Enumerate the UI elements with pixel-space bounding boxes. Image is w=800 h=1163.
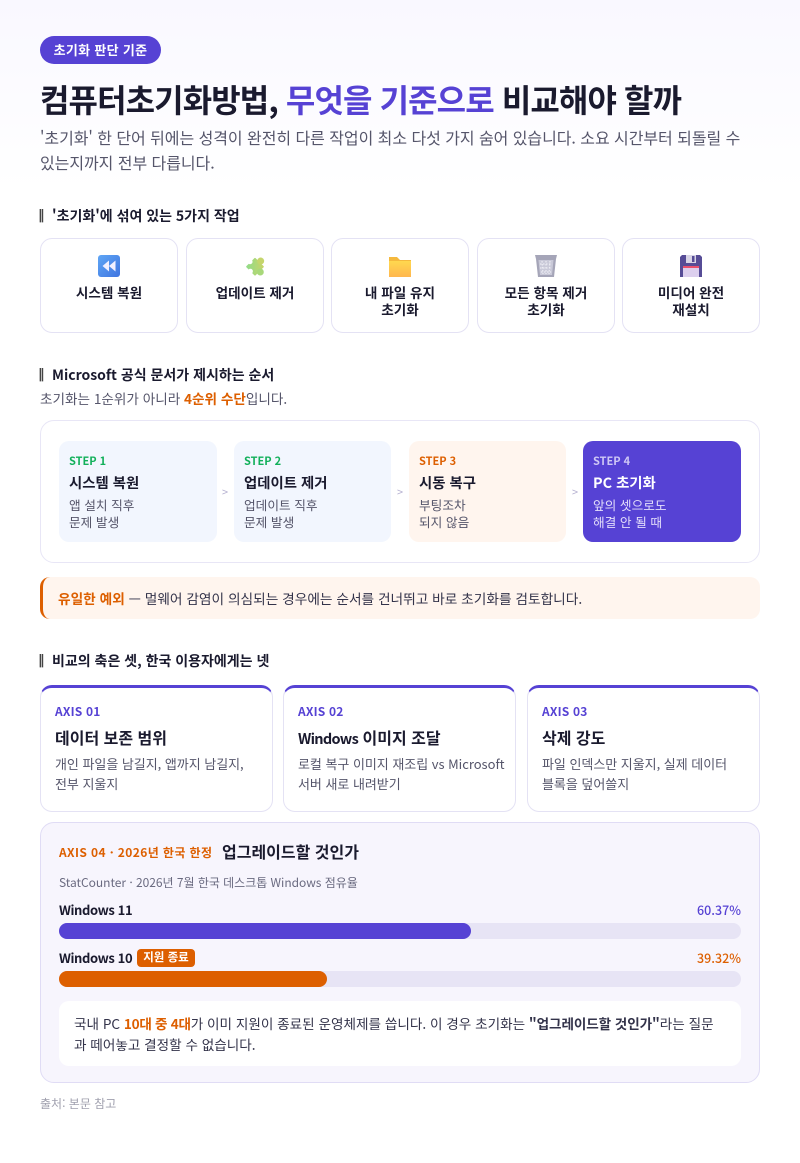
step 2: 업데이트 제거 — [244, 472, 327, 493]
axis 02: Windows 이미지 조달 — [298, 725, 441, 749]
step 2: STEP 2 — [244, 453, 281, 469]
step 1: STEP 1 — [69, 453, 106, 469]
callout: exception — [40, 577, 760, 619]
card: remove everything reset: 모든 항목 제거 — [505, 282, 587, 302]
step 2 — [234, 441, 391, 542]
heading: five tasks: '초기화'에 섞여 있는 5가지 작업 — [52, 206, 240, 226]
step 2: 업데이트 직후 — [244, 495, 318, 514]
source: 출처: 본문 참고 — [40, 1095, 116, 1112]
title: 컴퓨터초기화방법, 무엇을 기준으로 비교해야 할까 — [40, 76, 681, 122]
axis 01 — [40, 685, 273, 812]
step 3: 부팅조차 — [419, 495, 466, 514]
step 4: PC 초기화 — [593, 472, 656, 493]
step 3: 되지 않음 — [419, 512, 469, 531]
label: Windows 11 — [59, 900, 132, 919]
step 4 — [583, 441, 741, 542]
icon: wastebasket — [535, 255, 557, 277]
step 3: 시동 복구 — [419, 472, 476, 493]
step 3: STEP 3 — [419, 453, 456, 469]
value: 60.37% — [697, 900, 741, 919]
note — [59, 1001, 741, 1066]
icon: rewind — [98, 255, 120, 277]
bar — [59, 923, 741, 939]
card: keep files reset: 내 파일 유지 — [365, 282, 435, 302]
callout: exception: 유일한 예외 — 멀웨어 감염이 의심되는 경우에는 순서를 건너뛰고 바로 초기화를 검토합니다. — [58, 588, 582, 608]
axis 02: 서버 새로 내려받기 — [298, 774, 401, 793]
axis 02 — [283, 685, 516, 812]
axis 04 title: 업그레이드할 것인가 — [222, 839, 359, 863]
bar — [59, 971, 741, 987]
card: media reinstall — [622, 238, 760, 333]
panel: steps — [40, 420, 760, 563]
heading: five tasks: ‖ — [38, 208, 44, 223]
subheading: 초기화는 1순위가 아니라 4순위 수단입니다. — [40, 388, 287, 408]
arrow: > — [572, 484, 578, 500]
card: keep files reset — [331, 238, 469, 333]
icon: puzzle — [246, 258, 264, 276]
axis 02: 로컬 복구 이미지 재조립 vs Microsoft — [298, 754, 505, 773]
axis 04 label: AXIS 04 · 2026년 한국 한정 — [59, 844, 212, 861]
step 4: 해결 안 될 때 — [593, 512, 662, 531]
card: system restore — [40, 238, 178, 333]
intro text: 있는지까지 전부 다릅니다. — [40, 150, 215, 174]
axis 03: 삭제 강도 — [542, 725, 605, 749]
step 4: STEP 4 — [593, 453, 630, 469]
end of support tag — [137, 949, 195, 967]
axis 01: 데이터 보존 범위 — [55, 725, 167, 749]
label: Windows 10 — [59, 948, 132, 967]
step 1: 문제 발생 — [69, 512, 119, 531]
badge: 초기화 판단 기준 — [54, 40, 147, 59]
axis 01: 전부 지울지 — [55, 774, 118, 793]
note: 과 떼어놓고 결정할 수 없습니다. — [74, 1034, 256, 1054]
card: system restore: 시스템 복원 — [76, 282, 142, 302]
heading: axes: 비교의 축은 셋, 한국 이용자에게는 넷 — [52, 651, 269, 671]
axis 03: 블록을 덮어쓸지 — [542, 774, 629, 793]
panel: axis 04 — [40, 822, 760, 1083]
heading: axes: ‖ — [38, 653, 44, 668]
axis 03: 파일 인덱스만 지울지, 실제 데이터 — [542, 754, 727, 773]
axis 03 — [527, 685, 760, 812]
card: media reinstall: 재설치 — [672, 299, 710, 319]
icon: floppy disk — [680, 255, 702, 277]
card: remove everything reset: 초기화 — [527, 299, 565, 319]
heading: Microsoft order: Microsoft 공식 문서가 제시하는 순서 — [52, 365, 274, 385]
bar chart: Windows 11 — [59, 900, 741, 939]
value: 39.32% — [697, 948, 741, 967]
panel: five task cards — [40, 238, 760, 333]
end of support tag: 지원 종료 — [143, 949, 189, 965]
axis 03: AXIS 03 — [542, 703, 588, 720]
card: media reinstall: 미디어 완전 — [658, 282, 724, 302]
step 1: 시스템 복원 — [69, 472, 139, 493]
card: remove everything reset — [477, 238, 615, 333]
bar chart: Windows 10 — [59, 948, 741, 987]
card: update removal — [186, 238, 324, 333]
step 3 — [409, 441, 566, 542]
icon: folder — [389, 257, 411, 277]
badge — [40, 36, 161, 64]
arrow: > — [397, 484, 403, 500]
card: keep files reset: 초기화 — [381, 299, 419, 319]
heading: Microsoft order: ‖ — [38, 367, 44, 382]
step 1 — [59, 441, 217, 542]
step 4: 앞의 셋으로도 — [593, 495, 667, 514]
arrow: > — [222, 484, 228, 500]
step 1: 앱 설치 직후 — [69, 495, 134, 514]
card: update removal: 업데이트 제거 — [216, 282, 294, 302]
intro text: '초기화' 한 단어 뒤에는 성격이 완전히 다른 작업이 최소 다섯 가지 숨어 있습니다. 소요 시간부터 되돌릴 수 — [40, 125, 740, 149]
axis 02: AXIS 02 — [298, 703, 344, 720]
axis 01: 개인 파일을 남길지, 앱까지 남길지, — [55, 754, 244, 773]
axis 01: AXIS 01 — [55, 703, 101, 720]
intro text — [40, 125, 740, 174]
source line: StatCounter · 2026년 7월 한국 데스크톱 Windows 점유율 — [59, 874, 358, 891]
step 2: 문제 발생 — [244, 512, 294, 531]
note: 국내 PC 10대 중 4대가 이미 지원이 종료된 운영체제를 씁니다. 이 경우 초기화는 "업그레이드할 것인가"라는 질문 — [74, 1013, 714, 1033]
